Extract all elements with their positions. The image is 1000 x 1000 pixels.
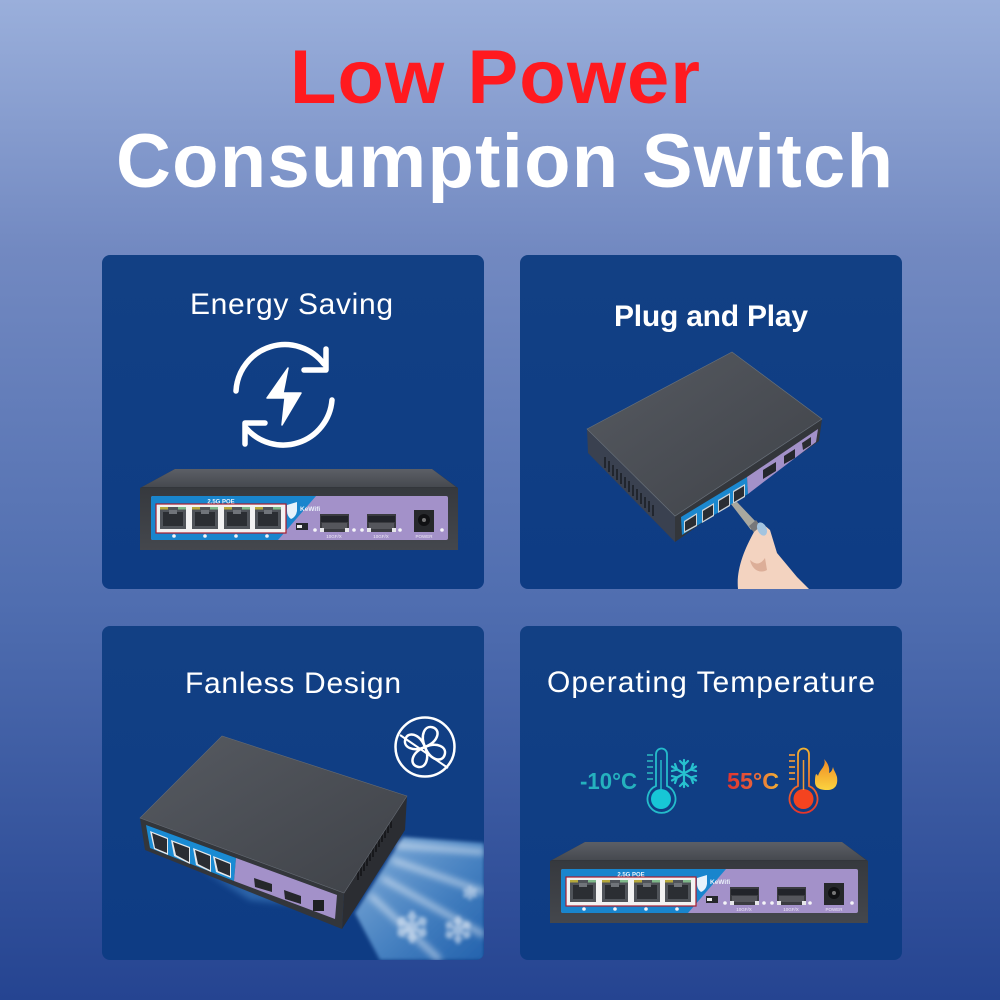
panel: energy saving (102, 255, 484, 589)
front view switch (550, 842, 868, 923)
front view switch (140, 469, 458, 550)
panel: operating temperature (520, 626, 902, 960)
panel: plug and play (520, 255, 902, 589)
heading: operating temperature: Operating Temperature (547, 666, 875, 699)
label: minus 10 degrees: -10°C (580, 768, 637, 794)
title: Consumption Switch (116, 119, 893, 204)
heading: fanless design: Fanless Design (185, 667, 401, 700)
hand holding cable (731, 502, 809, 589)
icon: no fan (396, 718, 454, 776)
icon: energy cycle (236, 345, 332, 445)
switch, angled view (140, 736, 407, 929)
icon: snowflake (672, 760, 696, 787)
icon: cold thermometer (647, 748, 676, 813)
switch, angled view (587, 352, 822, 542)
glow under switch (200, 868, 300, 905)
heading: energy saving: Energy Saving (190, 288, 393, 321)
label: 55 degrees: 55°C (727, 768, 779, 794)
title: Low Power (290, 35, 700, 120)
icon: flame (815, 759, 837, 790)
icon: hot thermometer (789, 748, 818, 813)
cold air flow (355, 837, 484, 960)
heading: plug and play: Plug and Play (614, 300, 808, 333)
panel: fanless design (102, 626, 484, 960)
title (116, 35, 893, 204)
